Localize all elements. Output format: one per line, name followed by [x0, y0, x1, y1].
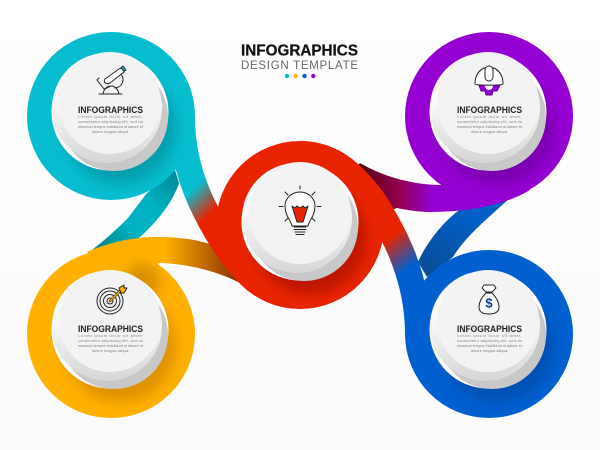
- ribbon: blue tail: [418, 198, 510, 277]
- panel: blue step: [405, 250, 573, 418]
- ribbon: purple connector: [352, 163, 530, 212]
- text: purple step body: dolore magna aliqua.: [471, 129, 508, 134]
- ribbon: yellow connector: [87, 237, 240, 283]
- label: purple step heading: INFOGRAPHICS: [457, 105, 522, 115]
- text: yellow step body: consectetur adipiscing elit, sed do: [78, 338, 144, 343]
- icon: dollar sign: $: [485, 296, 493, 310]
- panel: red centre step: [216, 141, 384, 309]
- text: yellow step body: Lorem ipsum dolor sit amet,: [78, 333, 143, 338]
- panel: teal step: [27, 32, 195, 200]
- panel: purple step: [405, 32, 573, 200]
- legend dots: [285, 74, 315, 78]
- text: blue step body: consectetur adipiscing elit, sed do: [457, 338, 523, 343]
- text: blue step body: dolore magna aliqua.: [471, 348, 508, 353]
- text: blue step body: Lorem ipsum dolor sit amet,: [457, 333, 522, 338]
- ribbon: red to blue: [300, 154, 418, 334]
- text: blue step body: eiusmod tempor incididunt ut labore et: [457, 343, 523, 348]
- text: teal step body: Lorem ipsum dolor sit amet,: [78, 114, 143, 119]
- title: INFOGRAPHICS: [241, 42, 358, 60]
- ribbon: teal to red: [182, 116, 300, 295]
- icon: helmet and gear: [475, 66, 503, 95]
- text: teal step body: eiusmod tempor incididunt ut labore et: [78, 124, 144, 129]
- icon: target with dart: [97, 285, 127, 314]
- text: yellow step body: dolore magna aliqua.: [92, 348, 129, 353]
- subtitle: DESIGN TEMPLATE: [241, 60, 358, 72]
- text: yellow step body: eiusmod tempor incididunt ut labore et: [78, 343, 144, 348]
- text: teal step body: dolore magna aliqua.: [92, 129, 129, 134]
- icon: light bulb: [279, 186, 321, 234]
- ribbon: teal tail: [92, 170, 179, 250]
- text: purple step body: [457, 114, 523, 134]
- icon: microscope: [97, 66, 126, 94]
- text: purple step body: eiusmod tempor incididunt ut labore et: [457, 124, 523, 129]
- panel: yellow step: [27, 250, 195, 418]
- label: yellow step heading: INFOGRAPHICS: [78, 324, 143, 334]
- text: teal step body: [78, 114, 144, 134]
- icon: money bag: [479, 285, 499, 314]
- text: purple step body: Lorem ipsum dolor sit amet,: [457, 114, 522, 119]
- title: [241, 42, 358, 72]
- text: purple step body: consectetur adipiscing elit, sed do: [457, 119, 523, 124]
- text: blue step body: [457, 333, 523, 353]
- label: teal step heading: INFOGRAPHICS: [78, 105, 143, 115]
- text: teal step body: consectetur adipiscing elit, sed do: [78, 119, 144, 124]
- text: yellow step body: [78, 333, 144, 353]
- label: blue step heading: INFOGRAPHICS: [457, 324, 522, 334]
